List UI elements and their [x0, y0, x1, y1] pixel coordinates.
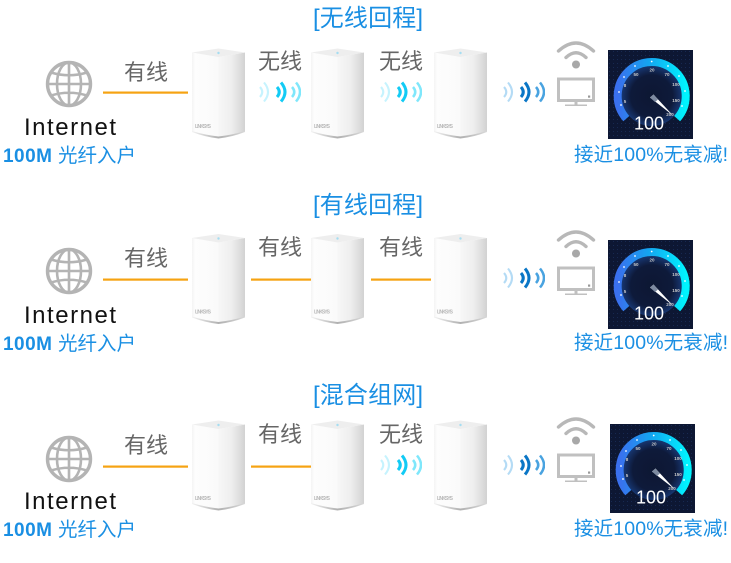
- speed gauge: [608, 50, 693, 139]
- result text: 接近100%无衰减!: [574, 518, 728, 540]
- wired link label 3: 有线: [379, 235, 423, 260]
- speed gauge: 100: [634, 114, 664, 134]
- icon: wireless waves to device: [504, 82, 544, 102]
- wired link 2: [251, 466, 311, 468]
- router 2: [311, 420, 364, 510]
- text: bandwidth: 光纤入户: [58, 145, 136, 167]
- text: Internet: Internet: [24, 114, 116, 141]
- wired link label 2: 有线: [258, 235, 302, 260]
- title: [无线回程]: [313, 5, 423, 32]
- icon: globe: [48, 438, 90, 480]
- icon: globe: [48, 62, 90, 106]
- speed gauge: [608, 240, 693, 329]
- icon: wireless waves 2: [381, 82, 421, 102]
- speed gauge: [610, 424, 695, 513]
- wired link: [103, 92, 188, 94]
- wired link label 2: 有线: [258, 422, 302, 447]
- icon: monitor: [558, 455, 594, 482]
- panel: wired backhaul: [3, 192, 728, 355]
- router 1: [192, 234, 245, 324]
- text: Internet: Internet: [24, 302, 116, 329]
- panel: hybrid network: [3, 382, 728, 541]
- title: [混合组网]: [313, 382, 423, 409]
- text: bandwidth: 光纤入户: [58, 333, 136, 355]
- result text: 接近100%无衰减!: [574, 332, 728, 354]
- icon: wifi: [558, 419, 594, 444]
- wired link label: 有线: [124, 246, 168, 271]
- icon: wireless waves 1: [260, 82, 300, 102]
- wired link label: 有线: [124, 60, 168, 85]
- icon: wireless waves to device: [504, 456, 544, 474]
- wired link 3: [371, 278, 431, 281]
- router 3: [434, 48, 487, 138]
- icon: globe: [48, 250, 90, 292]
- router 3: [434, 234, 487, 324]
- wireless link label 2: 无线: [379, 49, 423, 74]
- router 2: [311, 234, 364, 324]
- router 2: [311, 48, 364, 138]
- text: bandwidth: 100M: [3, 146, 52, 167]
- speed gauge: 100: [634, 304, 664, 324]
- icon: wifi: [558, 43, 594, 68]
- icon: wifi: [558, 232, 594, 258]
- result text: 接近100%无衰减!: [574, 144, 728, 166]
- wired link label: 有线: [124, 433, 168, 458]
- text: bandwidth: 100M: [3, 334, 52, 355]
- wired link: [103, 278, 188, 281]
- icon: wireless waves: [381, 456, 421, 474]
- wired link: [103, 466, 188, 468]
- panel: wireless backhaul: [3, 5, 728, 167]
- icon: wireless waves to device: [504, 268, 544, 288]
- icon: monitor: [558, 79, 594, 106]
- router 1: [192, 48, 245, 138]
- title: [有线回程]: [313, 192, 423, 219]
- wireless link label: 无线: [379, 422, 423, 447]
- speed gauge: 100: [636, 488, 666, 508]
- text: Internet: Internet: [24, 488, 116, 515]
- wired link 2: [251, 278, 311, 281]
- text: bandwidth: 100M: [3, 520, 52, 541]
- wireless link label 1: 无线: [258, 49, 302, 74]
- text: bandwidth: 光纤入户: [58, 519, 136, 541]
- router 3: [434, 420, 487, 510]
- router 1: [192, 420, 245, 510]
- icon: monitor: [558, 268, 594, 295]
